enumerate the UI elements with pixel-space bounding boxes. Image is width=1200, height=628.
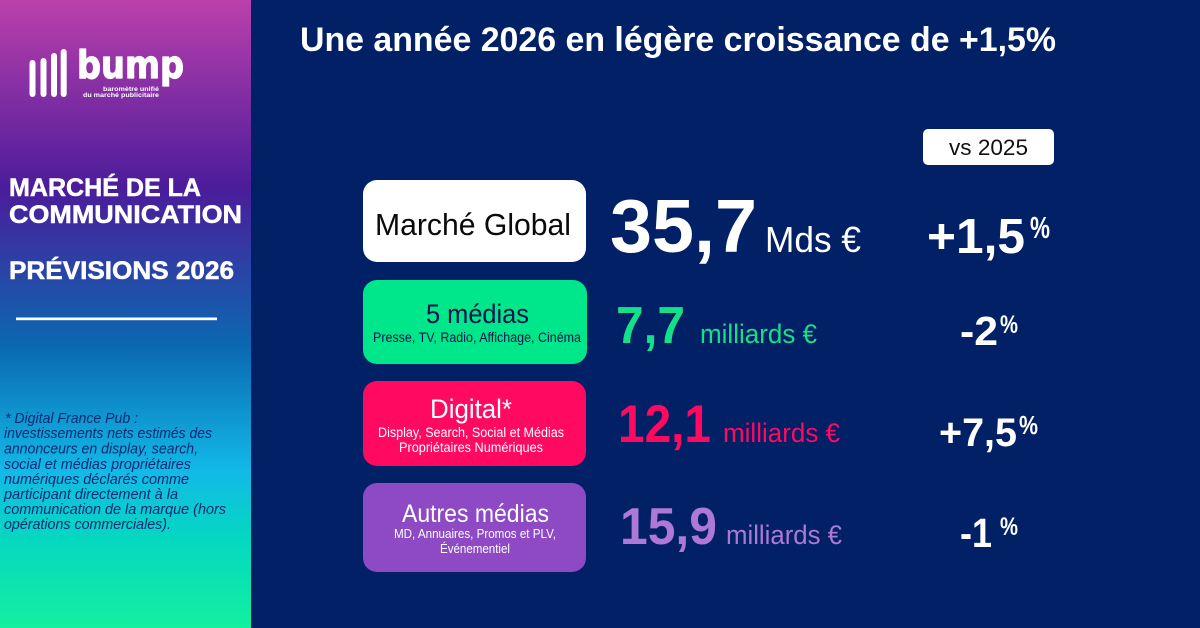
heading: marché de la communication: COMMUNICATION [9,201,242,229]
heading: prévisions 2026: PRÉVISIONS 2026 [9,256,234,285]
label box: autres médias: Événementiel [440,541,510,556]
logo: bump: baromètre unifié [103,86,159,93]
label box: 5 médias [363,280,587,364]
label box: 5 médias: 5 médias [426,299,529,329]
footnote: digital france pub: annonceurs en display, search, [4,442,198,458]
change: +7,5%: +7,5 [939,411,1017,455]
label box: digital [363,381,586,466]
label box: 5 médias: Presse, TV, Radio, Affichage, Cinéma [373,330,581,345]
heading: marché de la communication: MARCHÉ DE LA [9,173,201,202]
row: autres médias [363,483,1018,572]
row: 5 médias [363,280,1018,364]
value: 7,7 milliards €: milliards € [700,319,817,349]
logo: bump: du marché publicitaire [83,92,159,99]
logo: bump: bump [77,43,184,87]
badge: vs 2025 [923,129,1054,165]
badge: vs 2025: vs 2025 [949,135,1028,160]
value: 7,7 milliards €: 7,7 [616,297,685,355]
value: 12,1 milliards € [618,395,840,454]
footnote: digital france pub [3,411,226,533]
footnote: digital france pub: investissements nets estimés des [4,426,212,442]
label box: marché global: Marché Global [375,207,571,242]
change: -2% [960,308,1018,354]
footnote: digital france pub: opérations commerciales). [4,517,171,533]
footnote: digital france pub: communication de la marque (hors [4,502,226,518]
footnote: digital france pub: numériques déclarés comme [4,472,189,488]
label box: digital: Propriétaires Numériques [399,440,543,455]
change: -2%: -2 [960,308,998,354]
change: +7,5%: % [1019,410,1038,440]
label box: digital: Display, Search, Social et Médias [378,425,564,440]
value: 12,1 milliards €: milliards € [723,418,840,448]
change: -1% [960,510,1018,556]
label box: autres médias: Autres médias [402,500,549,528]
label box: autres médias [363,483,586,572]
value: 15,9 milliards €: milliards € [726,520,842,550]
divider line [16,318,217,320]
footnote: digital france pub: * Digital France Pub : [5,411,138,427]
label box: autres médias: MD, Annuaires, Promos et PLV, [394,527,556,541]
title: Une année 2026 en légère croissance de +1,5% [300,21,1056,59]
value: 15,9 milliards € [620,498,842,556]
label box: marché global [363,180,586,262]
logo: bump [30,43,184,99]
value: 15,9 milliards €: 15,9 [620,498,717,556]
panel: left sidebar [0,0,251,628]
value: 12,1 milliards €: 12,1 [618,395,711,454]
footnote: digital france pub: participant directement à la [3,487,178,503]
heading: marché de la communication [9,173,242,229]
change: -2%: % [1000,311,1018,339]
value: 7,7 milliards € [616,297,817,355]
row: marché global [363,180,1050,268]
change: +1,5%: % [1030,210,1050,245]
value: 35,7 Mds €: Mds € [765,219,861,260]
change: -1%: -1 [960,510,992,556]
label box: digital: Digital* [430,394,512,424]
change: -1%: % [1000,513,1018,541]
value: 35,7 Mds €: 35,7 [610,184,757,268]
footnote: digital france pub: social et médias propriétaires [4,457,191,473]
value: 35,7 Mds € [610,184,861,268]
change: +1,5%: +1,5 [927,210,1025,264]
row: digital [363,381,1038,466]
